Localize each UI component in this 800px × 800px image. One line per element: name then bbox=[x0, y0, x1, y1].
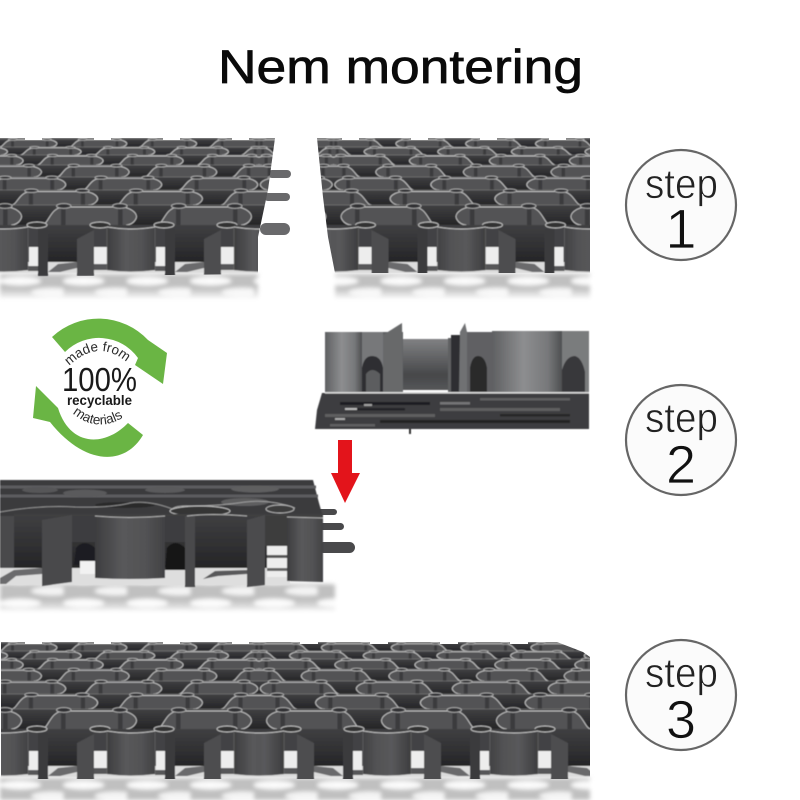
title: Nem montering bbox=[218, 40, 583, 93]
text: made from: made from bbox=[65, 342, 130, 366]
panel: step 2 mat close-up side view bbox=[315, 323, 589, 434]
post 2 bbox=[451, 323, 467, 392]
panel: step 3 joined grid mat bbox=[0, 642, 592, 800]
arch 2 bbox=[467, 332, 492, 392]
arrow: lower green bbox=[33, 386, 143, 457]
arrow: red down bbox=[331, 440, 360, 503]
wall section 2 bbox=[403, 339, 448, 390]
base strip bbox=[315, 392, 589, 434]
shadow: close-up mat bbox=[0, 584, 345, 614]
connector tabs: close-up mat bbox=[316, 509, 355, 553]
right post bbox=[247, 515, 265, 587]
post 1 bbox=[383, 323, 403, 392]
wall top highlights bbox=[95, 514, 323, 518]
panel: step 1 right grid mat bbox=[317, 138, 592, 298]
panel: step 2 lower mat close-up bbox=[0, 480, 355, 614]
icon: step 1 badge bbox=[626, 150, 736, 260]
icon: step 2 badge: 2 bbox=[666, 435, 696, 495]
arch 1 bbox=[362, 332, 383, 392]
end wall bbox=[287, 517, 323, 582]
icon: step 3 badge: step bbox=[645, 649, 718, 696]
shadow: joined mat bbox=[0, 778, 590, 800]
icon: step 1 badge: step bbox=[645, 160, 718, 207]
icon: step 3 badge: 3 bbox=[666, 690, 696, 750]
wall backing bbox=[362, 332, 589, 392]
arch 3 bbox=[562, 331, 589, 392]
wall section 3 bbox=[492, 331, 562, 392]
arch left bbox=[72, 516, 95, 574]
text: 100%: 100% bbox=[62, 361, 137, 398]
grid mat: joined bbox=[1, 642, 590, 779]
icon: recycling logo bbox=[33, 318, 167, 457]
arch right bbox=[265, 516, 287, 577]
text: materials: materials bbox=[73, 408, 122, 424]
recess wall bbox=[14, 514, 323, 568]
panel: step 1 left grid mat bbox=[0, 138, 291, 298]
grid mat: left bbox=[0, 138, 275, 276]
arch centre bbox=[165, 516, 187, 570]
icon: step 2 badge bbox=[626, 385, 736, 495]
connector tabs: left mat bbox=[260, 170, 291, 235]
floor shard bbox=[203, 570, 247, 579]
wall section 1 bbox=[325, 332, 362, 392]
shadow: right mat bbox=[330, 274, 592, 300]
upper rows bbox=[0, 480, 323, 520]
far-left wall bbox=[0, 516, 14, 568]
grid mat: close-up bbox=[0, 480, 323, 587]
convex wall bbox=[95, 516, 165, 579]
floor shards left bbox=[0, 568, 42, 584]
shadow: left mat bbox=[0, 274, 262, 300]
floor bbox=[0, 566, 290, 585]
left post bbox=[42, 515, 72, 586]
text: recyclable: recyclable bbox=[67, 392, 132, 408]
arrow: upper green bbox=[52, 319, 167, 384]
narrow post bbox=[185, 516, 195, 587]
icon: step 3 badge bbox=[626, 640, 736, 750]
icon: step 2 badge: step bbox=[645, 394, 718, 441]
icon: step 1 badge: 1 bbox=[665, 197, 697, 260]
grid mat: right bbox=[317, 138, 590, 273]
